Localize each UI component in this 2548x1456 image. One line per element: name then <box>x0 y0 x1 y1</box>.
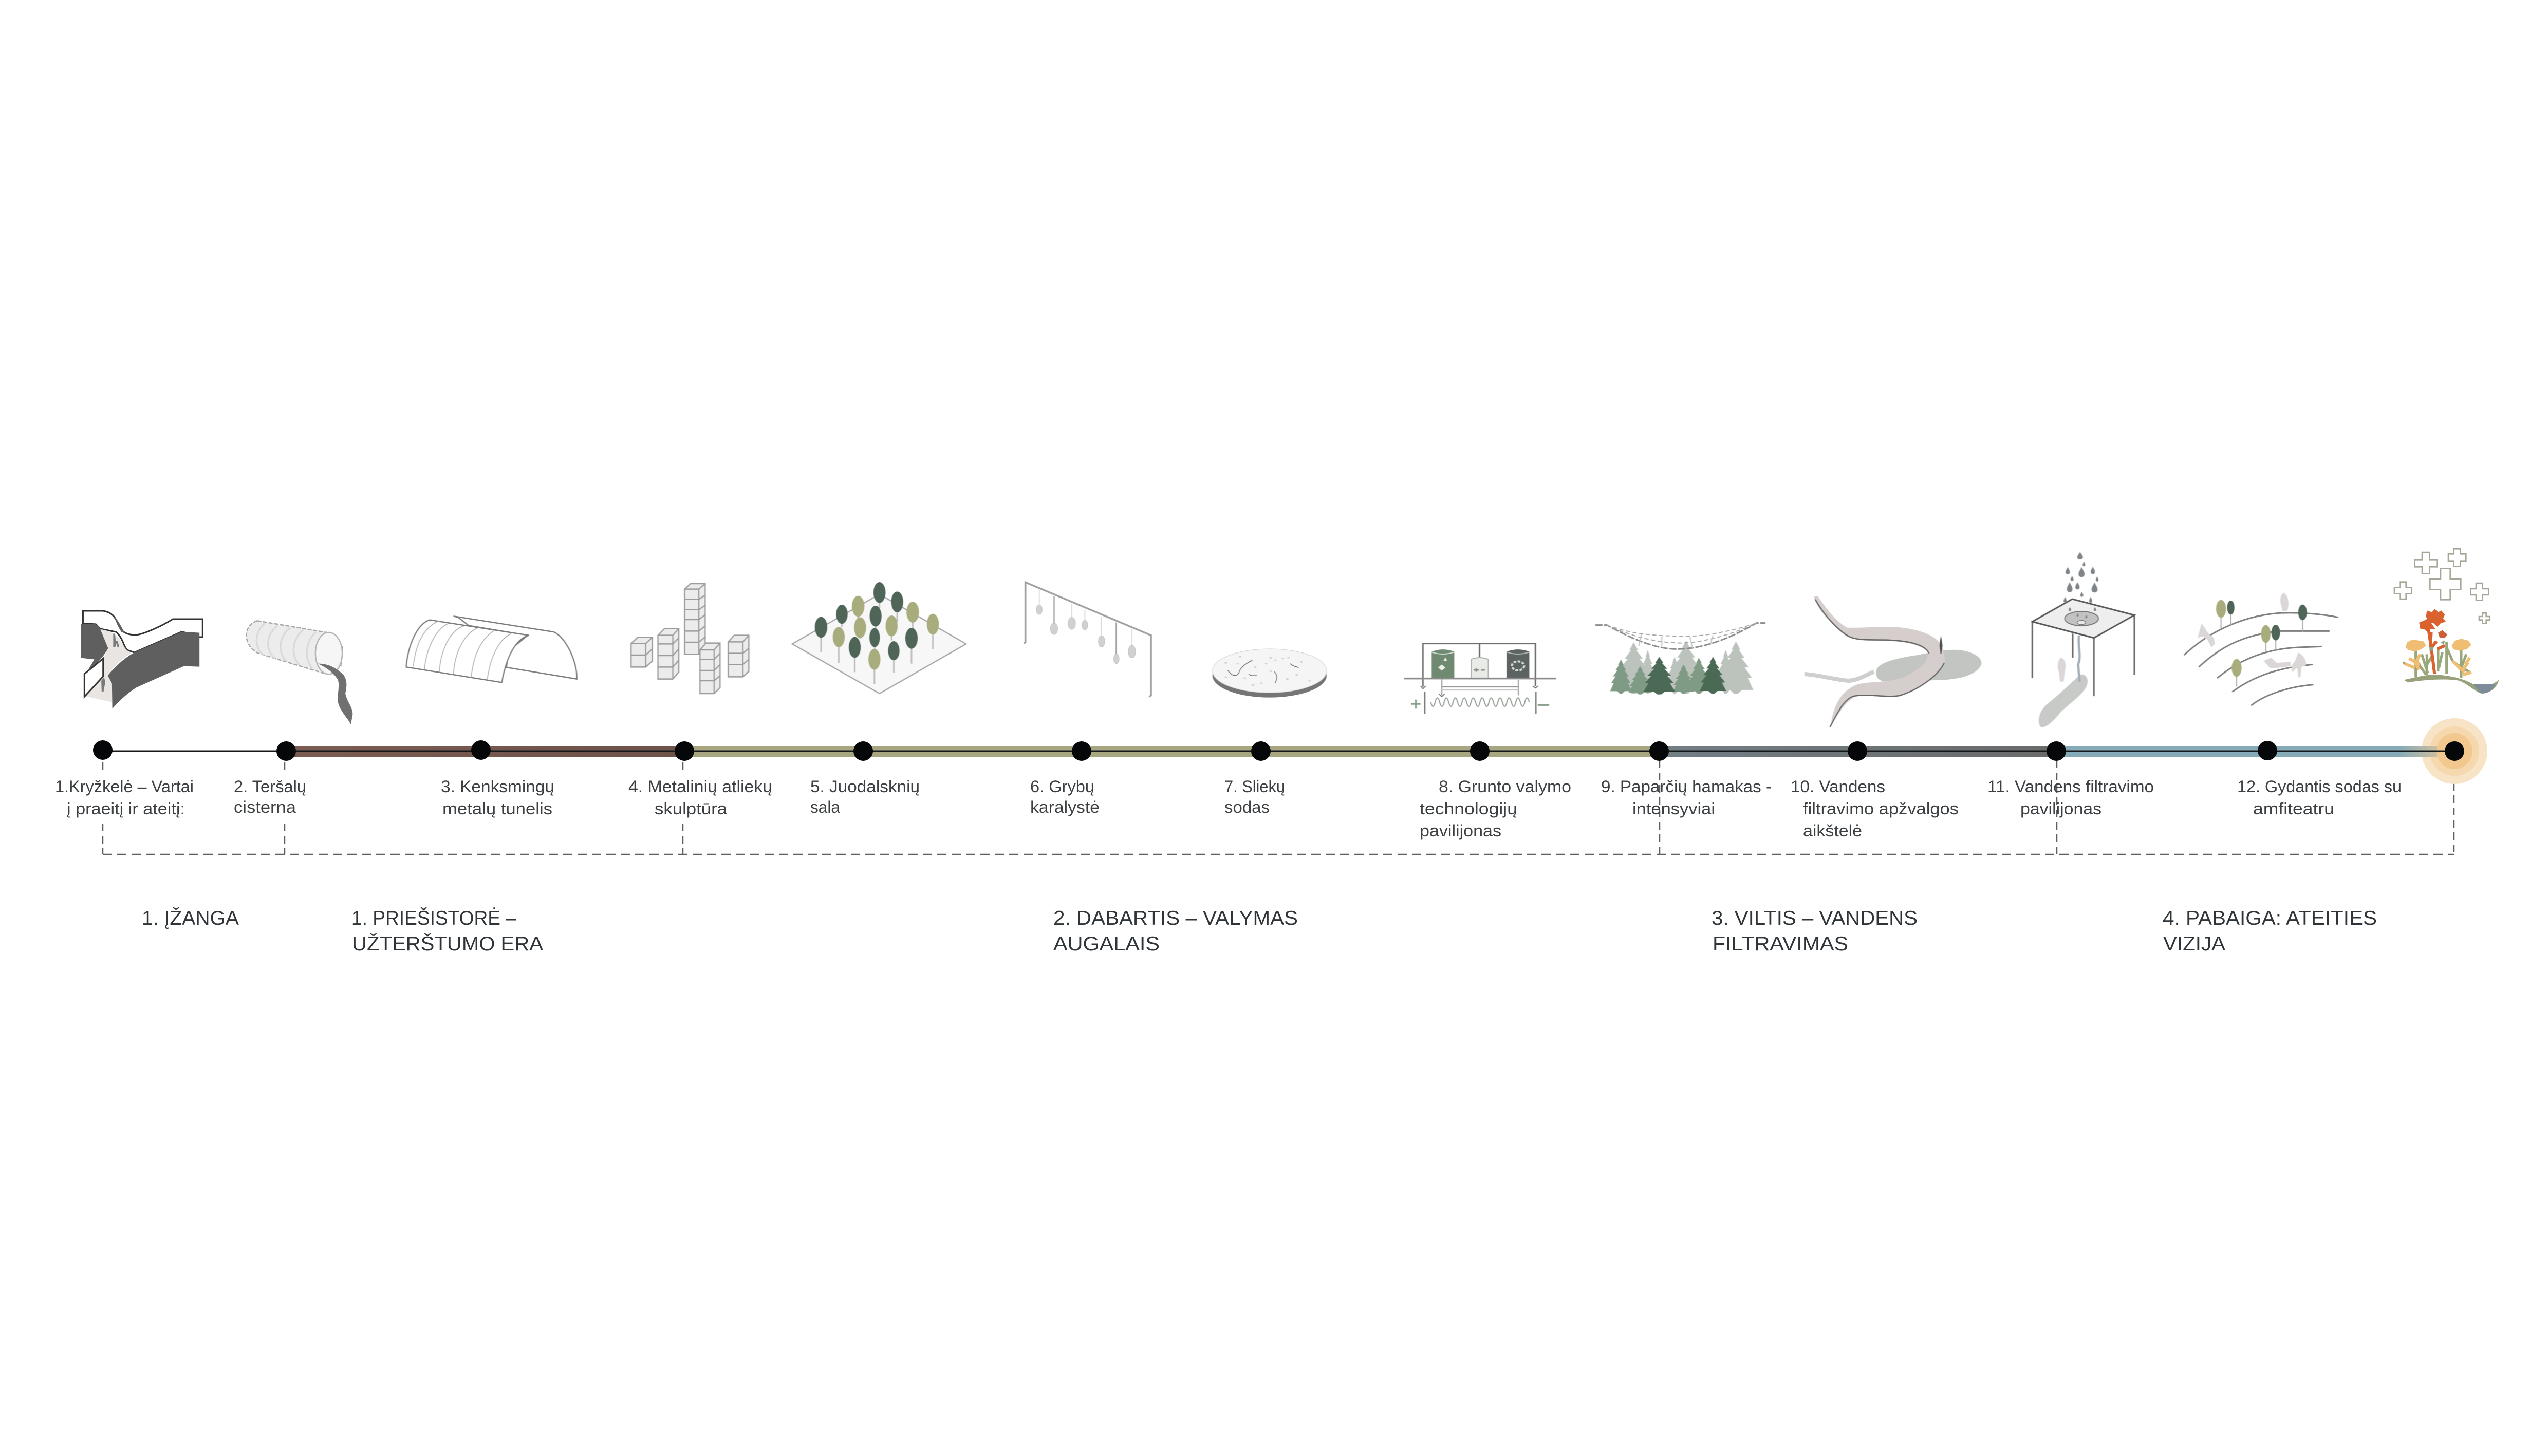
label: stop 11: 11. Vandens filtravimo <box>1987 777 2154 796</box>
label: stop 10: filtravimo apžvalgos <box>1803 799 1959 818</box>
icon: gate crossroads <box>81 611 202 708</box>
label: stop 12: 12. Gydantis sodas su <box>2237 777 2402 796</box>
label: stop 12: amfiteatru <box>2253 799 2334 818</box>
label: stop 3: 3. Kenksmingų <box>441 777 554 796</box>
icon: pollutant cistern <box>246 621 352 724</box>
label: stop 7: 7. Sliekų <box>1224 777 1285 796</box>
label: stop 8: technologijų <box>1420 799 1517 818</box>
icon: heavy metal tunnel <box>406 616 577 682</box>
label: stop 9: intensyviai <box>1632 799 1715 818</box>
main line <box>103 750 2454 752</box>
label: stop 2: cisterna <box>234 798 296 816</box>
label: stop 10 <box>1791 777 1959 840</box>
heading: hope <box>1712 907 1918 955</box>
label: stop 5: sala <box>810 798 840 816</box>
label: stop 8: 8. Grunto valymo <box>1439 777 1571 796</box>
icon: black alder island <box>792 582 966 694</box>
heading: prehistory: UŽTERŠTUMO ERA <box>352 932 543 955</box>
icon: healing garden amphitheatre <box>2184 592 2338 705</box>
heading: present: AUGALAIS <box>1053 933 1160 955</box>
icon: metal waste sculpture <box>631 584 749 694</box>
label: stop 8 <box>1420 777 1571 840</box>
heading: prehistory: 1. PRIEŠISTORĖ – <box>351 907 516 929</box>
heading: introduction: 1. ĮŽANGA <box>142 907 239 929</box>
icon: earthworm garden <box>1213 649 1327 698</box>
label: stop 8: pavilijonas <box>1420 822 1501 840</box>
label: stop 6: karalystė <box>1030 798 1100 816</box>
label: stop 10: 10. Vandens <box>1791 777 1885 796</box>
icon: water filtration pavilion <box>2032 552 2134 727</box>
label: stop 4: skulptūra <box>655 799 727 818</box>
label: stop 7: sodas <box>1224 798 1270 816</box>
icon: soil cleaning technology pavilion <box>1404 644 1556 714</box>
label: stop 6 <box>1030 777 1100 816</box>
heading: ending: VIZIJA <box>2163 933 2225 955</box>
icon: fern hammock <box>1595 623 1765 695</box>
icon: crosses and flowers <box>2394 549 2499 694</box>
icon: mushroom kingdom <box>1024 582 1151 697</box>
label: stop 5 <box>810 777 920 816</box>
band: future vision <box>2056 746 2437 757</box>
label: stop 3 <box>441 777 554 818</box>
icon: water filtration lookout <box>1805 596 1981 727</box>
heading: ending: 4. PABAIGA: ATEITIES <box>2163 907 2377 929</box>
label: stop 6: 6. Grybų <box>1030 777 1094 796</box>
stop markers <box>93 740 2464 761</box>
label: stop 1 <box>55 777 194 818</box>
heading: ending <box>2163 907 2377 955</box>
heading: present <box>1053 907 1298 955</box>
band: pollution era <box>286 746 684 757</box>
timeline <box>93 718 2487 854</box>
heading: hope: FILTRAVIMAS <box>1713 933 1848 955</box>
label: stop 9 <box>1601 777 1772 818</box>
label: stop 11 <box>1987 777 2154 818</box>
label: stop 1: 1.Kryžkelė – Vartai <box>55 777 194 796</box>
heading: present: 2. DABARTIS – VALYMAS <box>1053 907 1298 929</box>
label: stop 3: metalų tunelis <box>442 799 552 818</box>
label: stop 11: pavilijonas <box>2020 799 2101 818</box>
label: stop 4: 4. Metalinių atliekų <box>628 777 772 796</box>
label: stop 2 <box>234 777 306 816</box>
label: stop 7 <box>1224 777 1285 816</box>
label: stop 10: aikštelė <box>1803 822 1862 840</box>
label: stop 5: 5. Juodalsknių <box>810 777 920 796</box>
connector bracket: dashed lines <box>103 760 2454 854</box>
label: stop 4 <box>628 777 772 818</box>
band: plant cleaning <box>684 746 1659 757</box>
label: stop 9: 9. Paparčių hamakas - <box>1601 777 1772 796</box>
heading: prehistory <box>351 907 543 955</box>
end halo <box>2422 718 2487 784</box>
label: stop 1: į praeitį ir ateitį: <box>67 799 185 818</box>
label: stop 12 <box>2237 777 2402 818</box>
heading: hope: 3. VILTIS – VANDENS <box>1712 907 1918 929</box>
label: stop 2: 2. Teršalų <box>234 777 306 796</box>
band: water filtering <box>1659 746 2056 757</box>
